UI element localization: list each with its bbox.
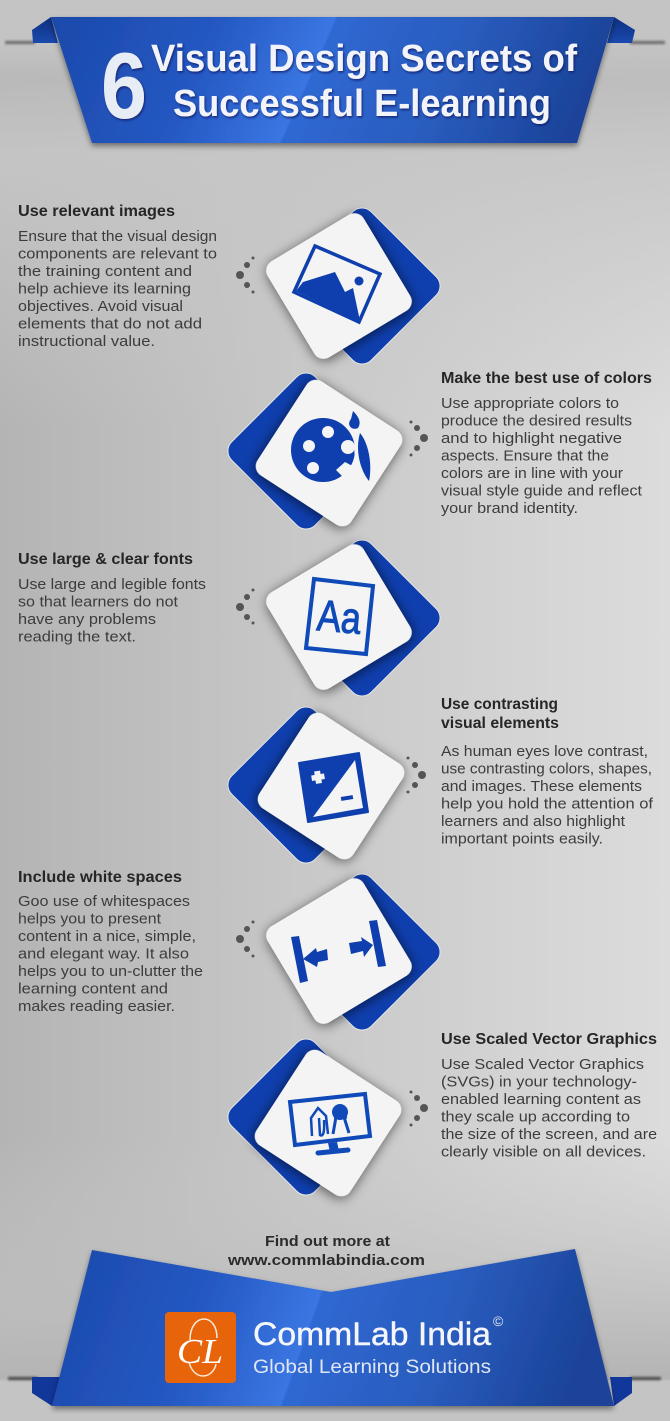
body text: objectives. Avoid visual: [18, 299, 183, 315]
icon: palette: [291, 411, 372, 486]
card: [223, 368, 406, 534]
body text: [441, 744, 654, 848]
body text: the size of the screen, and are: [441, 1127, 657, 1143]
panel: use of colors: [223, 368, 652, 534]
body text: As human eyes love contrast,: [441, 744, 648, 760]
icon: image: [294, 246, 380, 322]
copyright mark: ©: [493, 1313, 504, 1329]
heading: visual elements: [441, 715, 559, 732]
tagline: Global Learning Solutions: [253, 1357, 491, 1378]
body text: helps you to un-clutter the: [18, 964, 203, 980]
heading: Use Scaled Vector Graphics: [441, 1031, 657, 1048]
body text: learners and also highlight: [441, 814, 625, 830]
card: [262, 535, 445, 701]
body text: they scale up according to: [441, 1110, 630, 1126]
body text: [18, 229, 217, 350]
card: [262, 203, 445, 369]
panel: large fonts: [18, 535, 445, 701]
body text: help achieve its learning: [18, 282, 191, 298]
title text: Successful E-learning: [173, 83, 551, 125]
body text: and images. These elements: [441, 779, 642, 795]
body text: important points easily.: [441, 832, 603, 848]
body text: your brand identity.: [441, 501, 578, 517]
body text: [441, 396, 642, 517]
body text: [441, 1057, 657, 1160]
body text: Use Scaled Vector Graphics: [441, 1057, 644, 1073]
body text: and to highlight negative: [441, 431, 622, 447]
dots: [236, 588, 254, 624]
body text: have any problems: [18, 612, 156, 628]
dots: [410, 1090, 428, 1126]
heading: Use large & clear fonts: [18, 551, 193, 568]
logo: CL: [177, 1332, 223, 1371]
body text: so that learners do not: [18, 594, 178, 610]
body text: [18, 894, 203, 1015]
dots: [406, 756, 426, 794]
title banner: [5, 17, 665, 143]
call to action: [227, 1233, 425, 1269]
body text: Ensure that the visual design: [18, 229, 217, 245]
title number: 6: [101, 33, 147, 138]
body text: reading the text.: [18, 630, 136, 646]
body text: colors are in line with your: [441, 466, 623, 482]
icon: font: [306, 579, 373, 654]
body text: enabled learning content as: [441, 1092, 641, 1108]
panel: white spaces: [18, 869, 445, 1035]
body text: Use appropriate colors to: [441, 396, 619, 412]
card: [262, 869, 445, 1035]
body text: makes reading easier.: [18, 999, 175, 1015]
heading: Use contrasting: [441, 696, 558, 713]
body text: content in a nice, simple,: [18, 929, 196, 945]
heading: [441, 696, 559, 732]
card: [223, 702, 408, 868]
panel: use relevant images: [18, 203, 445, 369]
body text: aspects. Ensure that the: [441, 448, 609, 464]
body text: (SVGs) in your technology-: [441, 1074, 637, 1090]
call to action: Find out more at: [265, 1233, 390, 1250]
body text: elements that do not add: [18, 316, 202, 332]
dots: [410, 420, 428, 456]
body text: the training content and: [18, 264, 192, 280]
panel: contrasting visual elements: [223, 696, 654, 868]
footer banner: [8, 1249, 661, 1406]
body text: clearly visible on all devices.: [441, 1144, 646, 1160]
body text: components are relevant to: [18, 246, 217, 262]
title text: Visual Design Secrets of: [151, 38, 577, 80]
dots: [236, 920, 254, 958]
title text: [151, 38, 577, 125]
body text: instructional value.: [18, 334, 155, 350]
body text: and elegant way. It also: [18, 946, 189, 962]
icon: white space arrows: [291, 920, 386, 983]
heading: Make the best use of colors: [441, 370, 652, 387]
body text: help you hold the attention of: [441, 796, 654, 812]
logo: [165, 1312, 236, 1383]
card: [223, 1034, 405, 1200]
heading: Use relevant images: [18, 203, 175, 220]
call to action: www.commlabindia.com: [227, 1252, 425, 1269]
body text: helps you to present: [18, 912, 161, 928]
dots: [236, 256, 254, 294]
heading: Include white spaces: [18, 869, 182, 886]
body text: [18, 577, 206, 646]
body text: learning content and: [18, 982, 168, 998]
icon: contrast: [299, 753, 368, 822]
body text: use contrasting colors, shapes,: [441, 762, 652, 778]
company name: CommLab India: [253, 1316, 491, 1352]
body text: produce the desired results: [441, 414, 632, 430]
body text: visual style guide and reflect: [441, 484, 642, 500]
icon: monitor: [290, 1094, 370, 1153]
body text: Use large and legible fonts: [18, 577, 206, 593]
body text: Goo use of whitespaces: [18, 894, 190, 910]
icon: font: Aa: [315, 591, 364, 644]
panel: scaled vector graphics: [223, 1031, 657, 1200]
